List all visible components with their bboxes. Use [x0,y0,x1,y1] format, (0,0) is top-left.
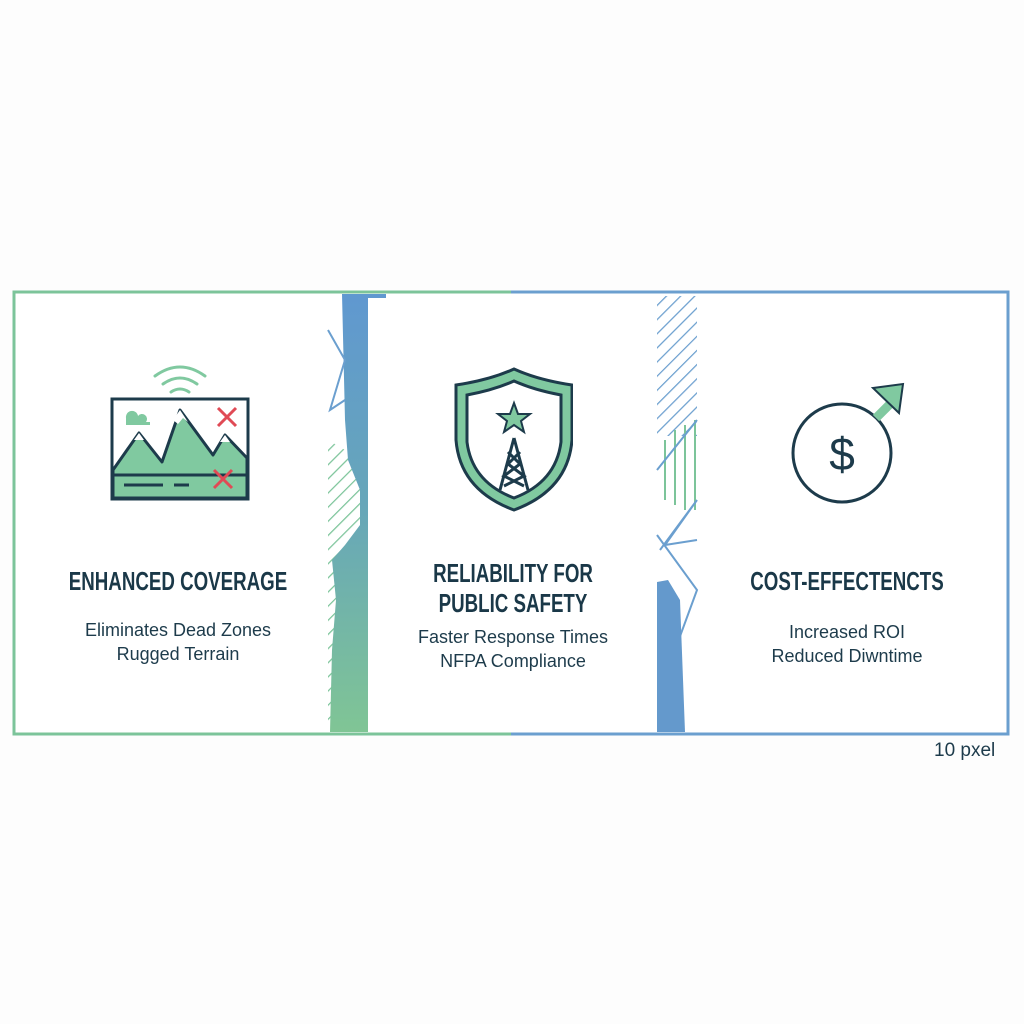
text: cost details: Reduced Diwntime [771,646,923,666]
heading: cost effectiveness: COST-EFFECTENCTS [750,566,944,596]
heading: enhanced coverage: ENHANCED COVERAGE [69,566,287,596]
text: coverage details: Eliminates Dead Zones [85,620,271,640]
text: cost details [771,622,923,666]
text: reliability details: Faster Response Times [418,627,608,647]
icon: shield with tower [454,367,573,512]
text: reliability details [418,627,608,671]
heading: reliability: PUBLIC SAFETY [439,588,587,618]
heading: reliability [433,558,593,618]
text: reliability details: NFPA Compliance [440,651,586,671]
icon: dollar with arrow [792,382,904,504]
text: coverage details [85,620,271,664]
icon: dollar with arrow: $ [829,428,855,480]
label: 10 pxel: 10 pxel [934,740,995,761]
text: coverage details: Rugged Terrain [117,644,239,664]
icon: landscape with signal [110,366,250,500]
text: cost details: Increased ROI [789,622,905,642]
heading: reliability: RELIABILITY FOR [433,558,593,588]
